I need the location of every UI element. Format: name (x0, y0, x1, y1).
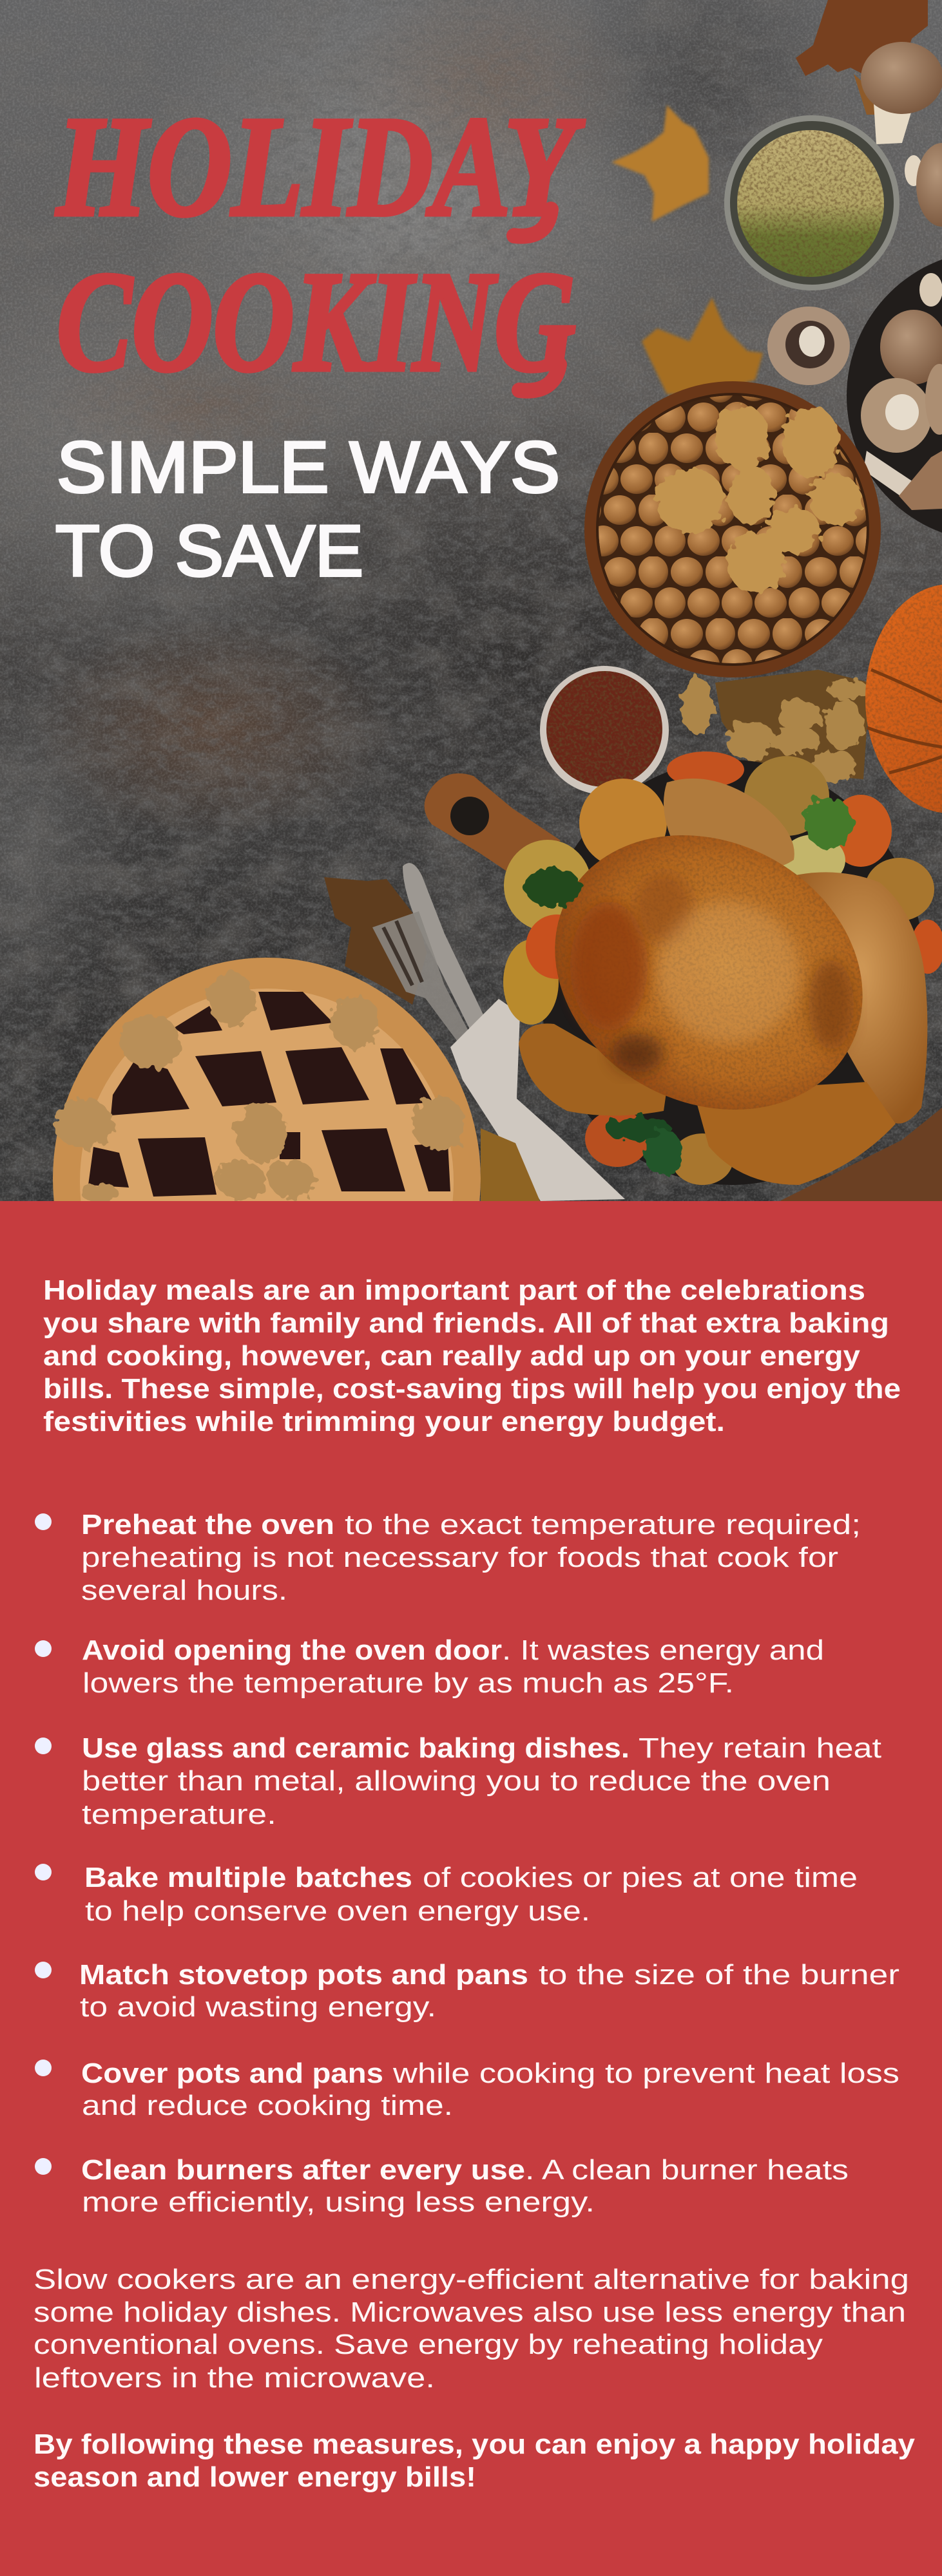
tip text: preheating is not necessary for foods that cook for (81, 1542, 838, 1573)
apple pie (53, 958, 481, 1399)
bullet (35, 1864, 52, 1880)
turkey lower thigh (693, 1082, 896, 1185)
subtitle: Simple Ways to Save (55, 427, 560, 591)
spice bowl (724, 115, 899, 290)
tip: avoid opening the oven door (35, 1634, 824, 1699)
tip: glass and ceramic baking dishes (35, 1732, 881, 1830)
tip text: temperature. (82, 1799, 276, 1830)
turkey right leg (793, 872, 927, 1124)
tip text: to avoid wasting energy. (80, 1991, 436, 2023)
gold leaf at bottom (481, 1128, 540, 1201)
paragraph: slow cookers and microwaves (34, 2264, 909, 2394)
concrete background (0, 0, 942, 1224)
fork (372, 911, 472, 1043)
mushroom single (767, 307, 850, 385)
paragraph: slow cookers and microwaves: conventional ovens. Save energy by reheating holiday (34, 2329, 823, 2360)
tip text: Use glass and ceramic baking dishes. (82, 1732, 630, 1764)
tip text: of cookies or pies at one time (423, 1862, 858, 1893)
tip text: Preheat the oven (81, 1509, 334, 1540)
yellow maple leaf (611, 105, 709, 222)
title: Holiday Cooking: COOKING (57, 243, 575, 401)
pumpkin (865, 584, 942, 813)
wooden bowl of nuts (584, 381, 881, 677)
turkey drumstick (519, 1023, 667, 1115)
bullet (35, 2158, 52, 2175)
panel: hero photo (0, 0, 942, 1201)
tip text (84, 1862, 858, 1927)
bullet (35, 1640, 52, 1657)
bullet (35, 1738, 52, 1754)
turkey (506, 779, 927, 1185)
mushroom top (861, 42, 942, 144)
tip text (81, 2058, 899, 2121)
cutting board handle (425, 773, 561, 877)
tip text: to the exact temperature required; (345, 1509, 861, 1540)
orange leaf behind bowl (642, 298, 763, 394)
red spice bowl (540, 666, 669, 795)
tip text: Cover pots and pans (81, 2058, 383, 2089)
closing statement: season and lower energy bills! (34, 2461, 476, 2493)
bullet (35, 2060, 52, 2076)
bullet (35, 1962, 52, 1978)
panel: red text section (0, 1201, 942, 2576)
bullet (35, 1513, 52, 1530)
intro paragraph: festivities while trimming your energy budget. (43, 1406, 725, 1437)
tip text: They retain heat (639, 1732, 881, 1764)
tip text: to help conserve oven energy use. (85, 1895, 590, 1927)
walnuts and leaves under bowl (680, 670, 870, 783)
tip text (82, 1732, 881, 1830)
brown leaf under cutlery (324, 877, 427, 1005)
tip text: Match stovetop pots and pans (79, 1959, 528, 1991)
intro paragraph: Holiday meals are an important part of the celebrations (43, 1274, 865, 1306)
pie walnuts (54, 972, 466, 1203)
mushroom right edge (905, 143, 942, 227)
tip text: to the size of the burner (539, 1959, 899, 1991)
tip text: . A clean burner heats (525, 2154, 849, 2186)
tip text: lowers the temperature by as much as 25°F. (82, 1667, 734, 1699)
title: Holiday Cooking (55, 88, 584, 401)
tip text: . It wastes energy and (502, 1634, 824, 1666)
tip text: more efficiently, using less energy. (82, 2186, 595, 2218)
turkey main body (506, 782, 911, 1162)
small leaf by mushroom (854, 74, 875, 115)
tip text (79, 1959, 899, 2023)
intro paragraph (43, 1274, 901, 1437)
herbs (524, 797, 853, 1176)
intro paragraph: you share with family and friends. All of that extra baking (43, 1307, 889, 1339)
tip text (82, 1634, 824, 1699)
paragraph: slow cookers and microwaves: leftovers in the microwave. (34, 2362, 435, 2394)
tip text: better than metal, allowing you to reduce the oven (82, 1765, 831, 1797)
tip text: Bake multiple batches (84, 1862, 412, 1893)
roast vegetables (503, 752, 942, 1185)
wooden board (780, 1108, 942, 1201)
pan under turkey (538, 760, 925, 1185)
turkey skin grain (506, 782, 911, 1162)
tip: clean burners after every use (35, 2154, 849, 2218)
walnuts (656, 405, 861, 594)
tip text: several hours. (81, 1575, 287, 1606)
tip: match stovetop pots and pans (35, 1959, 899, 2023)
intro paragraph: bills. These simple, cost-saving tips will help you enjoy the (43, 1373, 901, 1405)
tip text: and reduce cooking time. (82, 2090, 453, 2121)
intro paragraph: and cooking, however, can really add up on your energy (43, 1340, 861, 1372)
napkin (450, 999, 625, 1201)
tip text (81, 2154, 849, 2218)
paragraph: slow cookers and microwaves: Slow cookers are an energy-efficient alternative for baking (34, 2264, 909, 2295)
tip text: Clean burners after every use (81, 2154, 525, 2186)
pie filling cells (88, 992, 450, 1197)
title: Holiday Cooking: HOLIDAY (55, 88, 584, 246)
knife (403, 863, 488, 1037)
tip: cover pots and pans (35, 2058, 899, 2121)
closing statement: By following these measures, you can enjoy a happy holiday (34, 2429, 916, 2460)
paragraph: slow cookers and microwaves: some holiday dishes. Microwaves also use less energy than (34, 2297, 906, 2328)
tip: preheat the oven (35, 1509, 861, 1606)
dark pan of mushrooms (847, 251, 942, 542)
closing statement (34, 2429, 916, 2493)
tip text: Avoid opening the oven door (82, 1634, 502, 1666)
tip text (81, 1509, 861, 1606)
turkey upper wing (664, 779, 794, 882)
subtitle: Simple Ways to Save: TO SAVE (55, 511, 363, 591)
turkey glaze (570, 902, 648, 1030)
tip text: while cooking to prevent heat loss (392, 2058, 899, 2089)
tip: bake multiple batches (35, 1862, 858, 1927)
brown leaf top right (796, 0, 928, 76)
subtitle: Simple Ways to Save: SIMPLE WAYS (57, 427, 560, 507)
